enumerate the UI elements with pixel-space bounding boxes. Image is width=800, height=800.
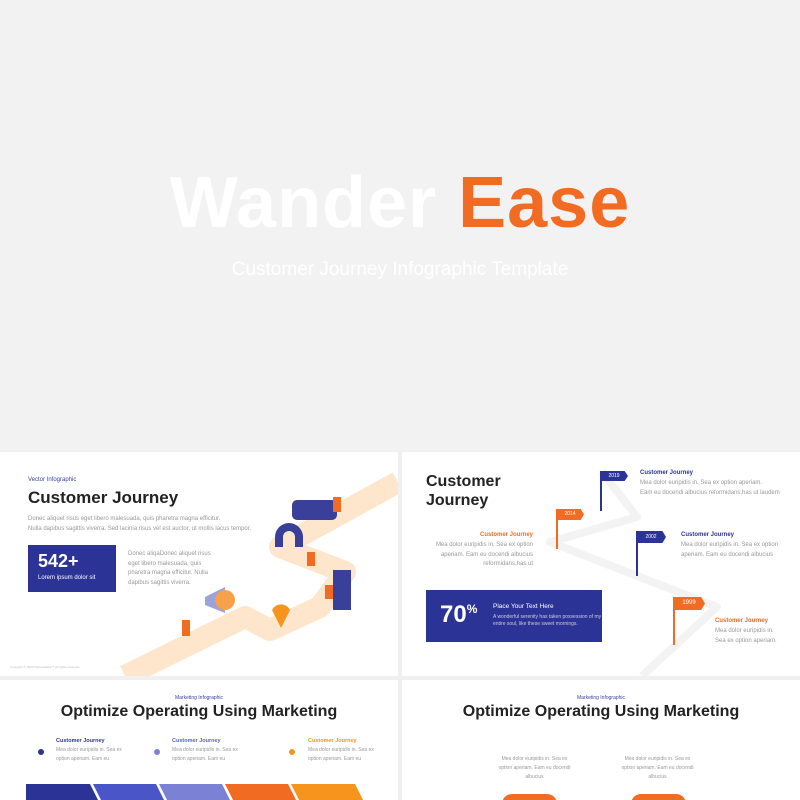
items: Customer Journey <box>308 738 357 744</box>
road <box>546 470 721 676</box>
stat box 70%: 70% <box>440 601 477 628</box>
panel: customer journey illustration <box>0 452 398 676</box>
hero panel <box>0 0 800 450</box>
panel: optimize 2: Mea dolor euripidis in. Sea ex option aperiam. Eam eu docendi albucius <box>622 756 694 780</box>
heading: Customer <box>426 473 501 490</box>
orange buttons <box>502 794 557 800</box>
flag 2002 <box>636 531 666 543</box>
item 2019: Customer Journey <box>640 470 693 476</box>
items: Customer Journey <box>56 738 105 744</box>
items <box>38 738 374 762</box>
text 2: Donec aliqaDonec aliquet risus eget libero malesuada, quis pharetra magna efficitur. Nulla dapibus sagittis viverra. <box>128 551 211 586</box>
panel: customer journey timeline: Mea dolor euripidis in. Sea ex option aperiam. <box>640 480 762 486</box>
panel: optimize 1 <box>0 680 398 800</box>
title: Wander Ease <box>170 163 630 243</box>
panel: customer journey illustration: Copyright © 2020 WanderEase™ All rights reserved. <box>10 665 80 669</box>
label: Marketing Infographic <box>175 695 223 701</box>
heading: Optimize Operating Using Marketing <box>61 703 337 720</box>
items: Mea dolor euripidis in. Sea ex option aperiam. Eam eu <box>308 747 374 762</box>
illustration: path <box>120 472 398 676</box>
label: Marketing Infographic <box>577 695 625 701</box>
stat box 70%: A wonderful serenity has taken possession of my entire soul, like these sweet mornings. <box>493 614 601 627</box>
text: Donec aliquet risus eget libero malesuada, quis pharetra magna efficitur. <box>28 516 220 522</box>
panel: customer journey timeline <box>402 452 800 676</box>
flag 2014 <box>556 509 584 520</box>
heading <box>426 473 501 509</box>
label: Vector Infographic <box>28 477 76 483</box>
stat box: 542+ <box>38 551 79 571</box>
subtitle: Customer Journey Infographic Template <box>232 259 568 280</box>
items: Customer Journey <box>172 738 221 744</box>
item 1999: Customer Journey <box>715 618 768 624</box>
flag 1999 <box>673 597 705 610</box>
texts: Mea dolor euripidis in. Sea ex option aperiam. Eam eu docendi albucius <box>498 756 570 780</box>
stat box 70%: Place Your Text Here <box>493 603 554 610</box>
heading: Customer Journey <box>28 488 178 507</box>
flag 2019 <box>600 471 628 481</box>
chevron bars <box>26 784 363 800</box>
flag 2019: 2019 <box>608 473 620 479</box>
stat box 70% <box>426 590 602 642</box>
item 2014: Customer Journey <box>480 532 533 538</box>
text <box>28 516 251 532</box>
item 2002: Customer Journey <box>681 532 734 538</box>
flag 1999: 1999 <box>682 600 696 606</box>
text: Nulla dapibus sagittis viverra. Sed lacinia risus vel est auctor, ut mollis lacus tempor. <box>28 526 251 532</box>
items: Mea dolor euripidis in. Sea ex option aperiam. Eam eu <box>172 747 238 762</box>
panel: customer journey timeline: Sea ex option aperiam. <box>715 638 777 644</box>
panel: customer journey timeline: Mea dolor euripidis in. Sea ex option aperiam. Eam eu docendi albucius <box>681 542 778 558</box>
heading: Optimize Operating Using Marketing <box>463 703 739 720</box>
stat box <box>28 545 116 592</box>
stat box: Lorem ipsum dolor sit <box>38 575 95 581</box>
items: Mea dolor euripidis in. Sea ex option aperiam. Eam eu <box>56 747 122 762</box>
panel: customer journey timeline: Eam eu docendi albucius reformidans,has ut laudem <box>640 490 780 496</box>
heading: Journey <box>426 492 488 509</box>
flag 2002: 2002 <box>645 534 657 540</box>
panel: customer journey timeline: Mea dolor euripidis in. <box>715 628 774 634</box>
panel: customer journey timeline: Mea dolor euripidis in. Sea ex option aperiam. Eam eu docendi albucius reformidans,has ut <box>436 542 533 567</box>
flag 2014: 2014 <box>564 511 576 517</box>
panel: optimize 2 <box>402 680 800 800</box>
